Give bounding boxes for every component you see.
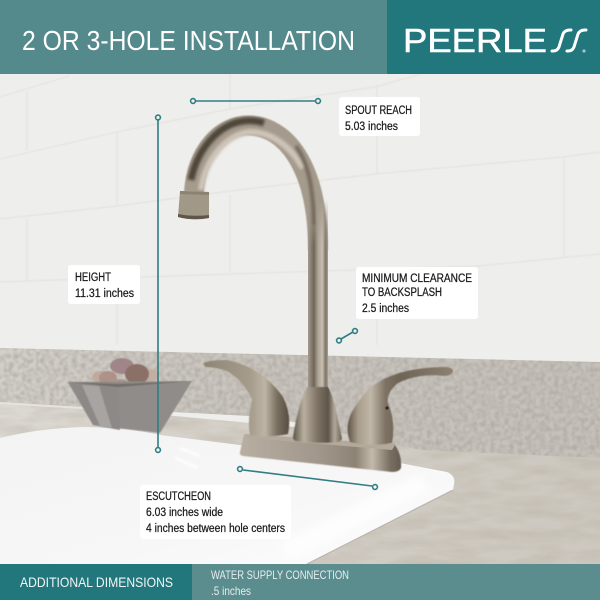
- dimension line: escutcheon: [238, 467, 377, 489]
- dimension line: height: [156, 115, 160, 452]
- footer band: additional dimensions: [0, 564, 192, 600]
- callout: spout reach: [339, 97, 420, 136]
- spout arc: [191, 121, 318, 250]
- centre hub: [293, 387, 342, 443]
- callout: escutcheon: 6.03 inches wide: [146, 507, 223, 519]
- dimension line: spout reach: [191, 99, 320, 103]
- footer band: water supply connection: .5 inches: [211, 584, 251, 598]
- callout: minimum clearance: TO BACKSPLASH: [362, 287, 442, 299]
- callout: minimum clearance: MINIMUM CLEARANCE: [362, 273, 472, 285]
- callout: minimum clearance: 2.5 inches: [362, 303, 409, 315]
- right handle: [348, 367, 453, 445]
- footer band: water supply connection: WATER SUPPLY CONNECTION: [211, 568, 349, 582]
- callout: height: [68, 265, 140, 304]
- footer band: additional dimensions: ADDITIONAL DIMENSIONS: [20, 574, 173, 590]
- left handle: [203, 360, 289, 436]
- callout: spout reach: 5.03 inches: [345, 121, 398, 133]
- base plate: [240, 434, 401, 472]
- callout: escutcheon: 4 inches between hole centers: [146, 523, 285, 535]
- callout: minimum clearance: [356, 267, 478, 319]
- cherries: [92, 358, 159, 387]
- callout: height: 11.31 inches: [75, 288, 134, 300]
- header band: title: 2 OR 3-HOLE INSTALLATION: [22, 25, 355, 56]
- header band: Peerless logo: PEERLE: [403, 22, 547, 59]
- dimension line: minimum clearance: [337, 329, 357, 343]
- callout: escutcheon: [140, 485, 291, 539]
- footer band: water supply connection: [192, 564, 600, 600]
- header band: title: [0, 0, 387, 74]
- sink rim and basin: [0, 427, 454, 564]
- callout: height: HEIGHT: [75, 272, 111, 284]
- header band: Peerless logo: [387, 0, 600, 74]
- spout nozzle: [178, 191, 209, 219]
- callout: spout reach: SPOUT REACH: [345, 105, 412, 117]
- faucet: [178, 121, 453, 472]
- callout: escutcheon: ESCUTCHEON: [146, 491, 211, 503]
- spout riser: [308, 200, 328, 391]
- countertop lower surface: [0, 400, 600, 564]
- granite backsplash band: [0, 348, 600, 458]
- bowl of cherries: [68, 358, 192, 433]
